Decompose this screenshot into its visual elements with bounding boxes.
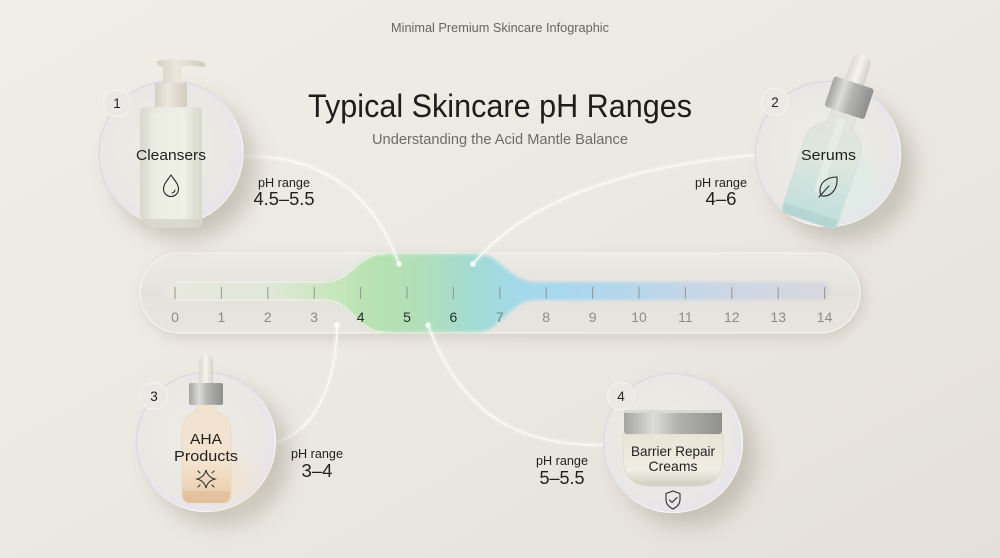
- bubble: [99, 81, 243, 225]
- title: Typical Skincare pH Ranges: [308, 88, 692, 124]
- scale numbers: 7: [496, 309, 504, 325]
- panel: barrier repair creams: [604, 374, 756, 526]
- scale numbers: 12: [724, 309, 740, 325]
- icon: pump bottle: [140, 59, 206, 228]
- icon: sparkle: [197, 470, 215, 488]
- pH callout: serums: pH range: [695, 176, 747, 190]
- panel: AHA products: [136, 355, 289, 525]
- scale numbers: 10: [631, 309, 647, 325]
- label: Barrier Repair: [631, 443, 715, 459]
- label: Cleansers: [136, 147, 206, 164]
- label: [631, 443, 715, 474]
- label: AHA: [190, 431, 222, 448]
- pH callout: AHA products: [291, 447, 343, 481]
- scale numbers: 9: [589, 309, 597, 325]
- pH callout: cleansers: [254, 176, 314, 209]
- pH callout: barrier repair creams: [536, 454, 588, 488]
- scale numbers: 6: [450, 309, 458, 325]
- bubble: [136, 372, 276, 512]
- number badge: 1: [113, 96, 121, 111]
- scale numbers: 2: [264, 309, 272, 325]
- scale numbers: [171, 309, 833, 325]
- scale numbers: 1: [218, 309, 226, 325]
- tick marks: [175, 287, 825, 299]
- icon: water drop: [164, 175, 178, 196]
- icon: leaf: [819, 177, 837, 197]
- pH callout: barrier repair creams: 5–5.5: [540, 468, 584, 488]
- connector: AHA products to scale: [277, 322, 340, 442]
- scale numbers: 3: [310, 309, 318, 325]
- pH callout: serums: [695, 176, 747, 209]
- number badge: 3: [150, 389, 158, 404]
- number badge: [140, 382, 168, 410]
- pH callout: AHA products: pH range: [291, 447, 343, 461]
- number badge: [762, 88, 788, 116]
- bubble: [604, 374, 742, 512]
- icon: amber dropper bottle: [182, 355, 231, 503]
- pH callout: cleansers: pH range: [258, 176, 310, 190]
- pH scale panel: [140, 253, 864, 338]
- connector: cleansers to scale: [245, 156, 402, 267]
- label: Products: [174, 448, 238, 465]
- bubble: [756, 82, 900, 226]
- scale numbers: 8: [542, 309, 550, 325]
- icon: shield check: [666, 491, 680, 509]
- label: [174, 431, 238, 465]
- number badge: [608, 382, 634, 410]
- number badge: [104, 90, 130, 116]
- scale numbers: 4: [357, 309, 365, 325]
- scale numbers: 13: [770, 309, 786, 325]
- icon: cream jar: [623, 410, 723, 486]
- panel: serums: [756, 46, 914, 241]
- scale numbers: 11: [678, 309, 693, 325]
- icon: dropper bottle: [780, 46, 891, 230]
- pH callout: barrier repair creams: pH range: [536, 454, 588, 468]
- subtitle: Understanding the Acid Mantle Balance: [372, 131, 628, 148]
- number badge: 2: [771, 95, 779, 110]
- pH callout: cleansers: 4.5–5.5: [254, 189, 314, 209]
- connector: barrier creams to scale: [425, 322, 603, 445]
- label: Creams: [648, 458, 698, 474]
- scale numbers: 0: [171, 309, 179, 325]
- pH callout: serums: 4–6: [706, 189, 736, 209]
- spectrum bar: [166, 254, 830, 332]
- scale numbers: 14: [817, 309, 833, 325]
- scale numbers: 5: [403, 309, 411, 325]
- connector: serums to scale: [470, 155, 755, 267]
- panel: cleansers: [99, 59, 256, 240]
- eyebrow heading: Minimal Premium Skincare Infographic: [391, 21, 609, 35]
- pH callout: AHA products: 3–4: [302, 461, 332, 481]
- number badge: 4: [617, 389, 625, 404]
- label: Serums: [801, 147, 856, 164]
